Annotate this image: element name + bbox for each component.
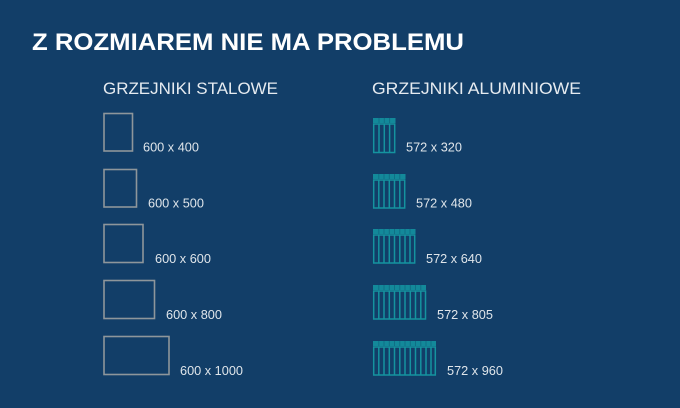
- aluminium radiator 572 x 805: [373, 285, 493, 322]
- steel radiator 600 x 1000: 600 x 1000: [180, 364, 243, 378]
- aluminium radiator 572 x 640: [373, 229, 482, 266]
- steel radiator 600 x 500: [104, 170, 204, 210]
- steel radiator 600 x 600: 600 x 600: [155, 252, 211, 266]
- steel radiator 600 x 400: 600 x 400: [143, 140, 199, 154]
- aluminium radiator 572 x 480: 572 x 480: [416, 196, 472, 210]
- aluminium radiator 572 x 320: 572 x 320: [406, 140, 462, 154]
- steel radiator 600 x 800: [104, 280, 222, 322]
- aluminium radiator 572 x 960: [373, 341, 503, 378]
- title: Z ROZMIAREM NIE MA PROBLEMU: [32, 29, 464, 56]
- heading: aluminium radiators: GRZEJNIKI ALUMINIOWE: [372, 79, 581, 98]
- aluminium radiator 572 x 640: 572 x 640: [426, 252, 482, 266]
- steel radiator 600 x 800: 600 x 800: [166, 308, 222, 322]
- steel radiator 600 x 1000: [104, 336, 243, 378]
- heading: steel radiators: GRZEJNIKI STALOWE: [103, 79, 278, 98]
- aluminium radiator 572 x 805: 572 x 805: [437, 308, 493, 322]
- steel radiator 600 x 500: 600 x 500: [148, 196, 204, 210]
- steel radiator 600 x 400: [104, 114, 199, 154]
- aluminium radiator 572 x 960: 572 x 960: [447, 364, 503, 378]
- aluminium radiator 572 x 480: [373, 174, 472, 210]
- aluminium radiator 572 x 320: [373, 118, 462, 154]
- steel radiator 600 x 600: [104, 224, 211, 266]
